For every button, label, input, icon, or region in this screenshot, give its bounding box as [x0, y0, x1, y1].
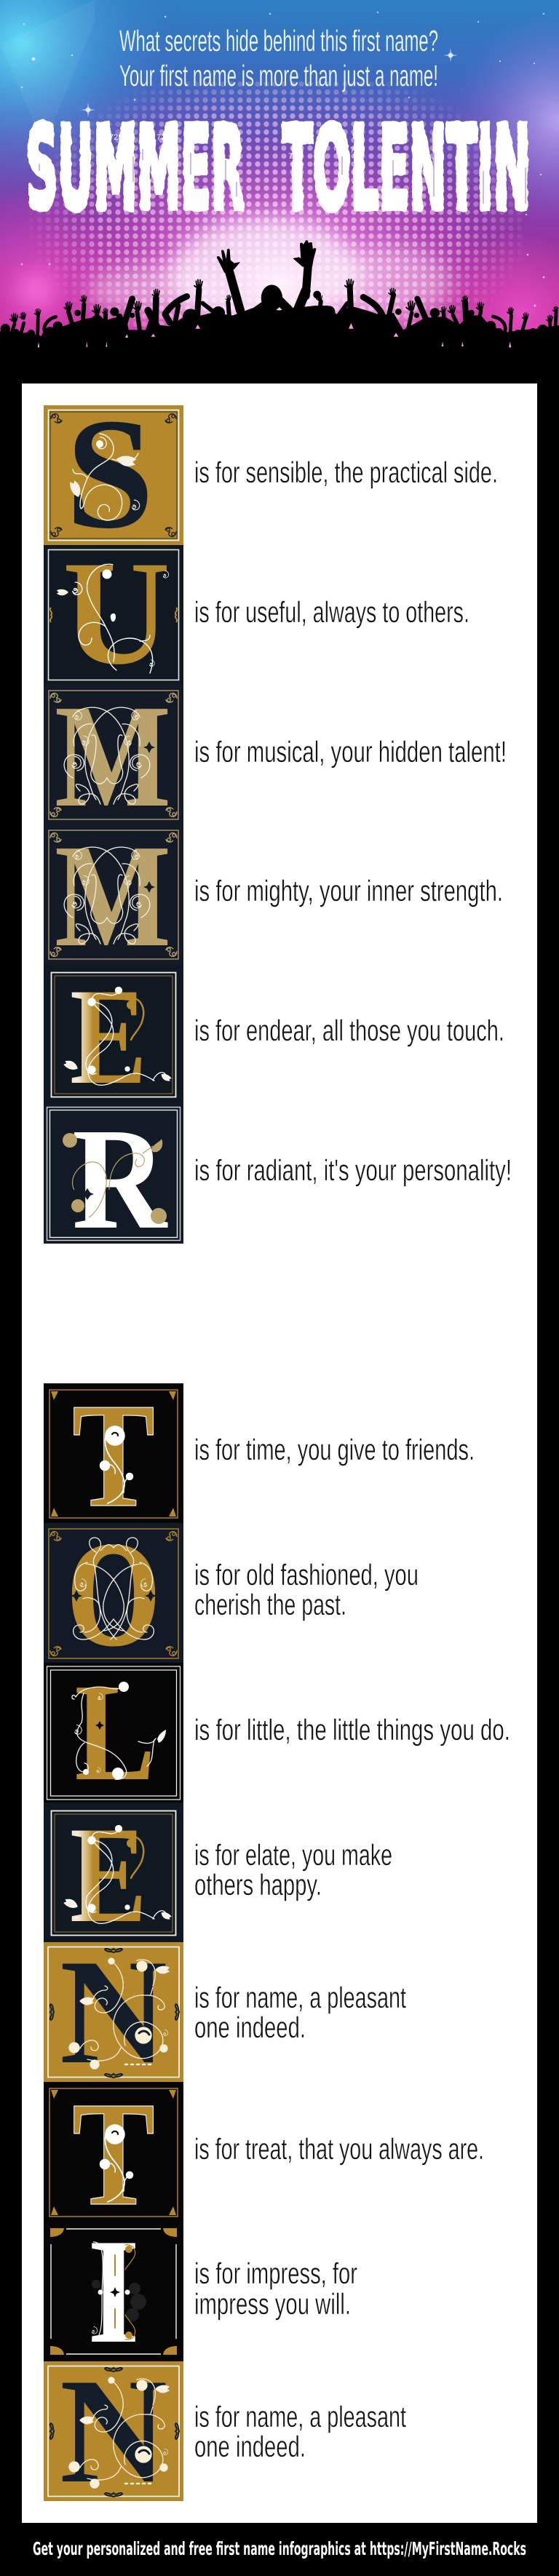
letter tile N (last): N	[60, 2348, 167, 2514]
letter tile R: R	[72, 1099, 168, 1260]
caption N first: one indeed.	[194, 2011, 306, 2044]
letter tile M (mighty): M	[55, 814, 171, 977]
caption I: impress you will.	[194, 2287, 351, 2321]
caption N first	[194, 1981, 406, 2044]
caption E elate: others happy.	[194, 1868, 322, 1901]
letter tile S: S	[66, 386, 154, 562]
letter tile M (musical): M	[55, 674, 171, 838]
caption I: is for impress, for	[194, 2257, 357, 2290]
caption N last: one indeed.	[194, 2430, 306, 2463]
caption N last	[194, 2400, 406, 2463]
crowd silhouette left	[0, 249, 282, 364]
white content panel lower part	[22, 1068, 537, 2523]
letter tile E (endear): E	[70, 961, 147, 1113]
title grunge marks: 729	[350, 146, 363, 155]
letter tile U: U	[63, 530, 170, 696]
letter tile I	[44, 2208, 183, 2374]
letter tile E (endear)	[44, 961, 183, 1113]
letter tile E (elate): E	[70, 1799, 147, 1952]
caption O: is for old fashioned, you	[194, 1558, 419, 1591]
caption O	[194, 1558, 419, 1621]
letter tile T (time): T	[72, 1372, 155, 1538]
caption E elate: is for elate, you make	[194, 1838, 392, 1872]
title grunge marks: 72	[459, 152, 467, 161]
title grunge marks: 729	[109, 133, 122, 142]
letter tile N (first): N	[60, 1928, 167, 2095]
caption E elate	[194, 1838, 392, 1901]
title grunge marks: 67	[82, 149, 90, 158]
letter tile O: O	[67, 1512, 160, 1677]
caption O: cherish the past.	[194, 1588, 346, 1621]
caption I	[194, 2257, 357, 2321]
crowd silhouette right	[278, 240, 559, 364]
letter tile S	[44, 386, 183, 562]
letter tile L: L	[74, 1655, 156, 1810]
letter tile L	[44, 1655, 183, 1810]
letter tile T (treat): T	[72, 2070, 155, 2237]
white content panel	[22, 383, 537, 1068]
letter tile E (elate)	[44, 1799, 183, 1952]
caption N first: is for name, a pleasant	[194, 1981, 406, 2014]
intro text	[119, 24, 438, 92]
header banner: concert background	[0, 0, 559, 364]
caption N last: is for name, a pleasant	[194, 2400, 406, 2433]
title grunge marks: 729	[156, 133, 170, 142]
title grunge marks: 72	[288, 152, 297, 161]
title grunge marks	[39, 133, 526, 204]
letter tile I: I	[87, 2208, 140, 2374]
